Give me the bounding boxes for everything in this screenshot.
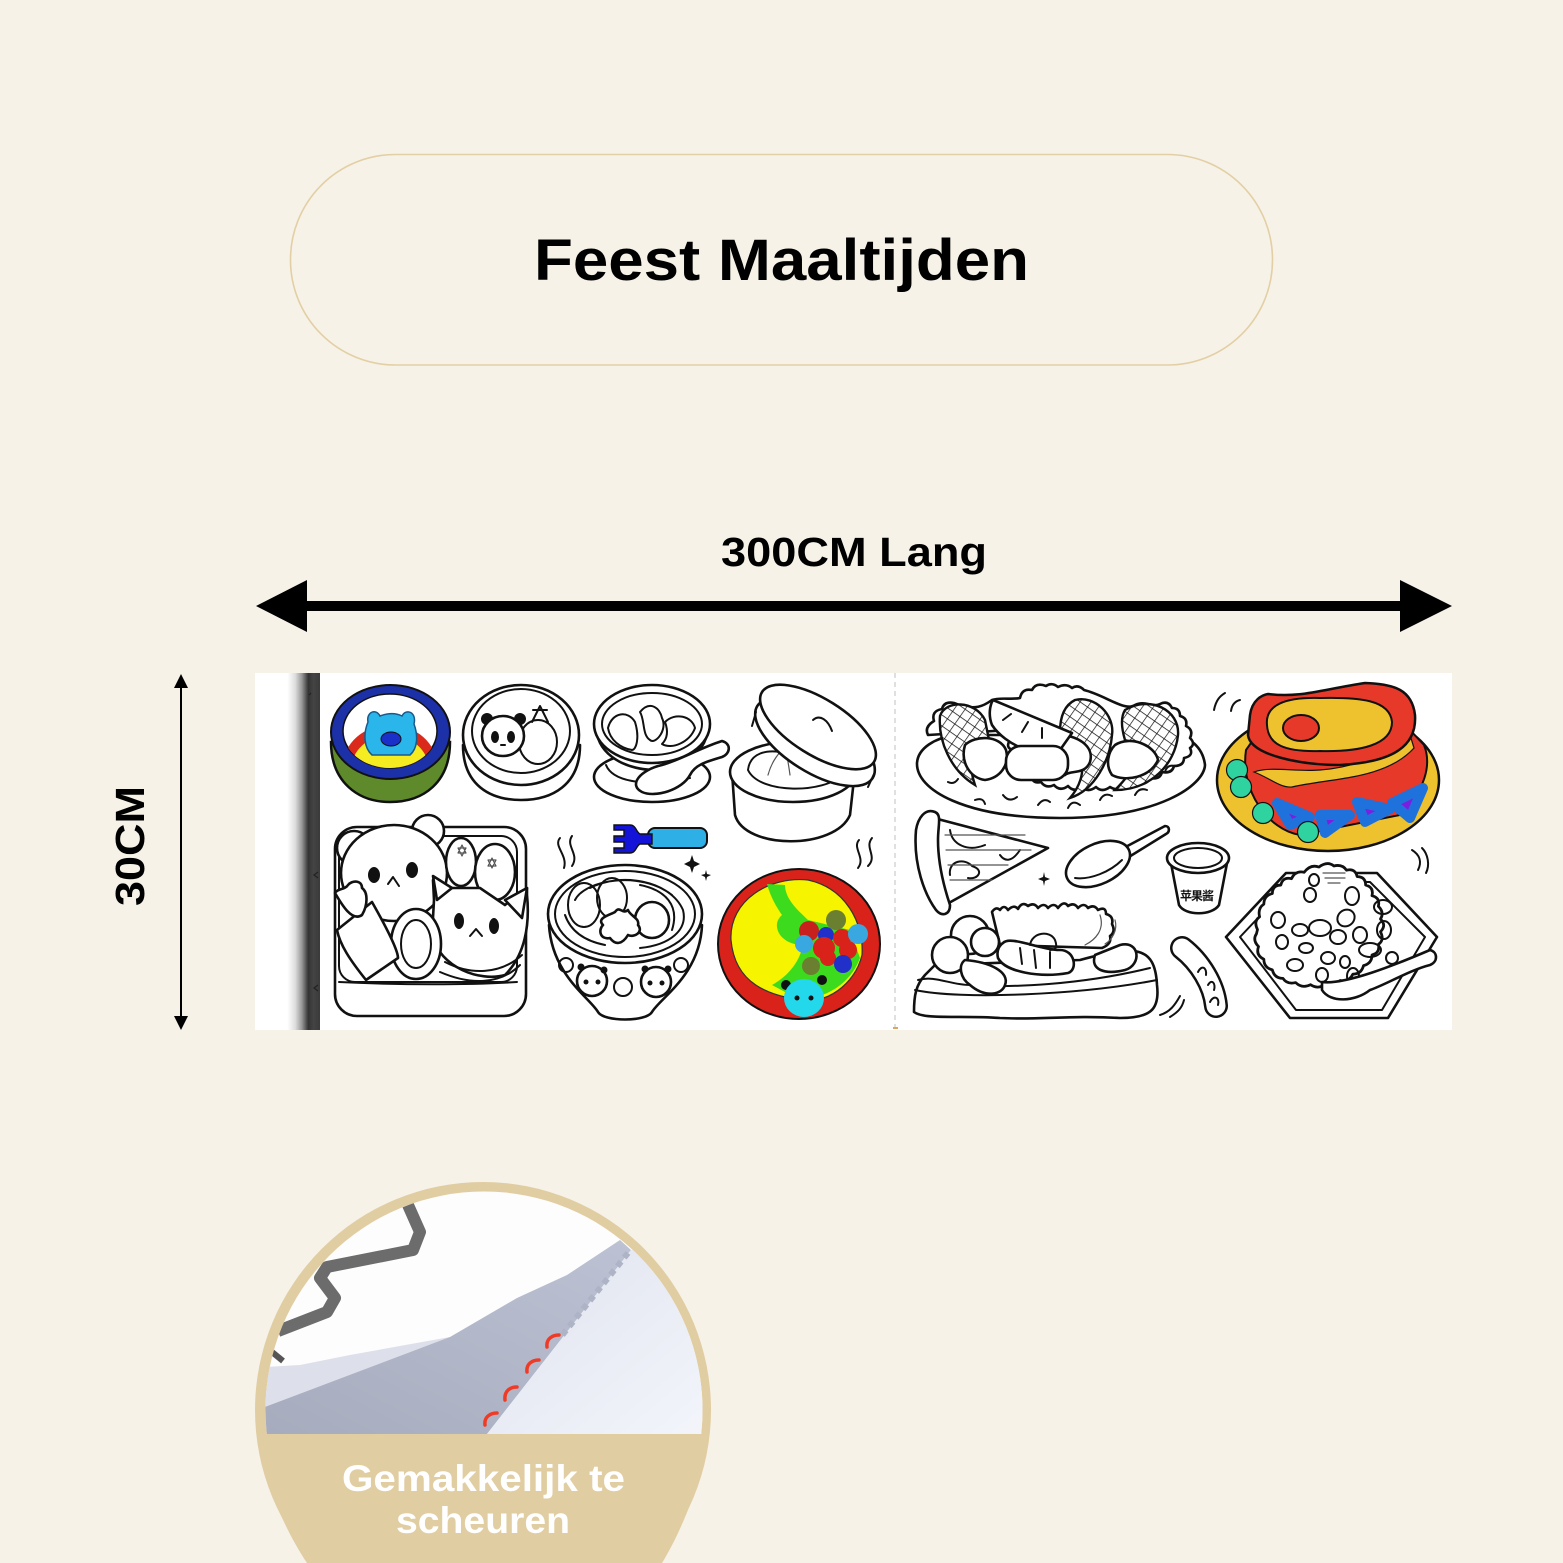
- badge ring: [255, 1182, 711, 1563]
- food: coloured red plate: [718, 869, 880, 1019]
- food: jam cup: [1167, 843, 1229, 913]
- title text: Feest Maaltijden: [534, 228, 1029, 293]
- roll shadow: [255, 673, 320, 1030]
- title pill: [290, 154, 1272, 365]
- food: paddle spoon: [1038, 826, 1169, 896]
- tear detail badge: scheuren: [396, 1500, 570, 1541]
- colouring roll panel: [255, 668, 1452, 1030]
- food: fried rice plate: [1226, 848, 1437, 1018]
- food: panda steamer: [463, 685, 580, 800]
- height label: 30CM: [107, 786, 153, 906]
- food: loose sausage: [1160, 948, 1218, 1017]
- icon: blue fork: [614, 825, 707, 853]
- icon: steam and sparkles: [558, 836, 872, 881]
- caption: Gemakkelijk te: [342, 1458, 625, 1499]
- length label: 300CM Lang: [721, 529, 987, 575]
- jam label: 苹果酱: [1180, 888, 1214, 903]
- tear detail badge: [255, 1180, 715, 1563]
- food: toast with sausage: [914, 903, 1158, 1018]
- food: bento box with bear and cat: [335, 815, 528, 1016]
- food: soup bowl with spoon: [594, 685, 729, 802]
- food: noodle bowl with pandas: [548, 865, 702, 1020]
- vertical arrow: 30cm height: [174, 674, 188, 1030]
- food: pizza slice: [916, 811, 1048, 914]
- food: coloured bowl: [331, 685, 450, 807]
- food: dumpling steamer with lid: [730, 668, 889, 841]
- food: coloured steak plate: [1214, 683, 1439, 851]
- paper photo: [255, 1180, 715, 1434]
- horizontal arrow: 300cm length: [256, 580, 1452, 632]
- food: salad plate with waffles: [917, 684, 1205, 818]
